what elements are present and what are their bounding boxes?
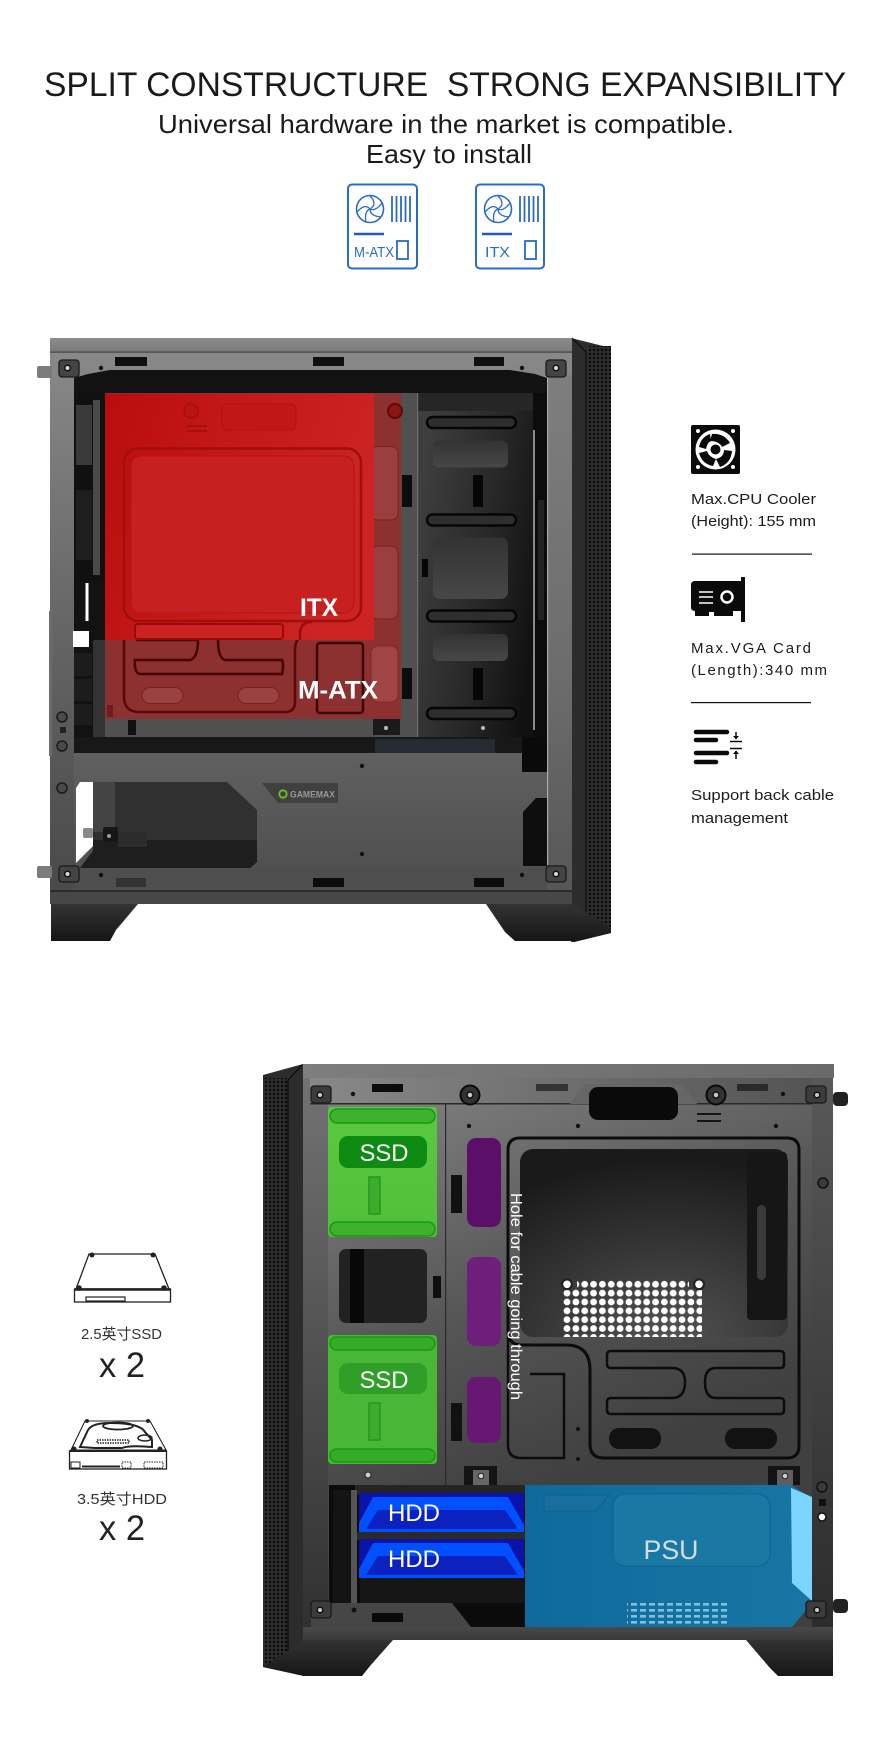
icon: M-ATX motherboard bbox=[348, 184, 417, 268]
motherboard tray bbox=[93, 393, 417, 737]
area: PSU bay bbox=[525, 1485, 812, 1627]
label: cable hole note: Hole for cable going through bbox=[507, 1193, 524, 1400]
case body bbox=[303, 1064, 834, 1640]
logo: GAMEMAX bbox=[262, 783, 338, 803]
area: ITX motherboard size bbox=[105, 394, 374, 640]
area: SSD bay 2: SSD bbox=[360, 1367, 408, 1394]
area: HDD bay 2 bbox=[359, 1539, 524, 1578]
label: M-ATX: M-ATX bbox=[298, 676, 378, 704]
text: HDD capacity label: 3.5英寸HDD bbox=[77, 1490, 167, 1508]
lower strip bbox=[74, 366, 547, 890]
text: SSD capacity label: 2.5英寸SSD bbox=[81, 1325, 162, 1343]
case front panel bbox=[571, 338, 611, 942]
feet bbox=[51, 904, 611, 942]
stamped panel outline bbox=[508, 1138, 799, 1458]
text: HDD quantity: x 2 bbox=[99, 1509, 145, 1548]
rear fan and expansion slots bbox=[57, 393, 105, 793]
icon: 3.5 inch HDD bbox=[70, 1419, 166, 1469]
tray bottom and shroud bbox=[74, 719, 547, 868]
text: CPU cooler bbox=[691, 491, 816, 530]
empty drive slot bbox=[339, 1175, 462, 1441]
icon: ITX motherboard: ITX bbox=[485, 244, 510, 261]
feet bbox=[263, 1640, 833, 1676]
area: SSD bay 1: SSD bbox=[360, 1140, 408, 1167]
text: cable management bbox=[691, 787, 834, 827]
text: VGA card: Max.VGA Card bbox=[691, 640, 811, 657]
area: HDD bay 1: HDD bbox=[388, 1500, 440, 1527]
area: cable routing holes bbox=[467, 1138, 501, 1443]
text: cable management: Support back cable bbox=[691, 787, 834, 804]
icon: 2.5 inch SSD bbox=[74, 1252, 170, 1302]
label: ITX: ITX bbox=[300, 594, 338, 622]
area: HDD bay 1 bbox=[359, 1493, 524, 1532]
icon: ITX motherboard bbox=[476, 184, 544, 268]
text: CPU cooler: (Height): 155 mm bbox=[691, 513, 816, 530]
area: PSU bay: PSU bbox=[644, 1535, 698, 1565]
drive bay interior bbox=[311, 1485, 525, 1627]
case front panel bbox=[263, 1064, 304, 1676]
back window bbox=[520, 1149, 788, 1337]
area: M-ATX motherboard size bbox=[105, 394, 402, 719]
text: CPU cooler: Max.CPU Cooler bbox=[691, 491, 816, 508]
text: VGA card: (Length):340 mm bbox=[691, 662, 827, 679]
corner screws bbox=[311, 1086, 848, 1618]
panel: case rear view with drive bays bbox=[263, 1064, 848, 1676]
area: SSD bay 2 bbox=[328, 1335, 437, 1464]
icon: VGA card bbox=[691, 577, 745, 622]
logo: GAMEMAX: GAMEMAX bbox=[290, 790, 335, 800]
icon: cable management bbox=[696, 732, 742, 762]
panel: case side view with motherboard sizes bbox=[37, 338, 611, 942]
corner screws bbox=[37, 360, 566, 882]
text: cable management: management bbox=[691, 810, 789, 827]
subtitle bbox=[158, 109, 734, 169]
icon: M-ATX motherboard: M-ATX bbox=[354, 244, 394, 261]
area: SSD bay 1 bbox=[328, 1107, 437, 1237]
PSU cutout bbox=[76, 782, 257, 868]
subtitle: Universal hardware in the market is compatible. bbox=[158, 109, 734, 139]
lower tray fittings bbox=[365, 1466, 800, 1485]
drive cage bbox=[417, 393, 547, 753]
subtitle: Easy to install bbox=[366, 139, 532, 169]
area: HDD bay 2: HDD bbox=[388, 1546, 440, 1573]
icon: CPU cooler fan bbox=[691, 425, 740, 474]
top strip details bbox=[351, 1084, 785, 1461]
text: SSD quantity: x 2 bbox=[99, 1346, 145, 1385]
text: VGA card bbox=[691, 640, 827, 679]
title: SPLIT CONSTRUCTURE STRONG EXPANSIBILITY bbox=[44, 66, 846, 104]
case body bbox=[49, 338, 572, 904]
vents bbox=[609, 1428, 777, 1449]
